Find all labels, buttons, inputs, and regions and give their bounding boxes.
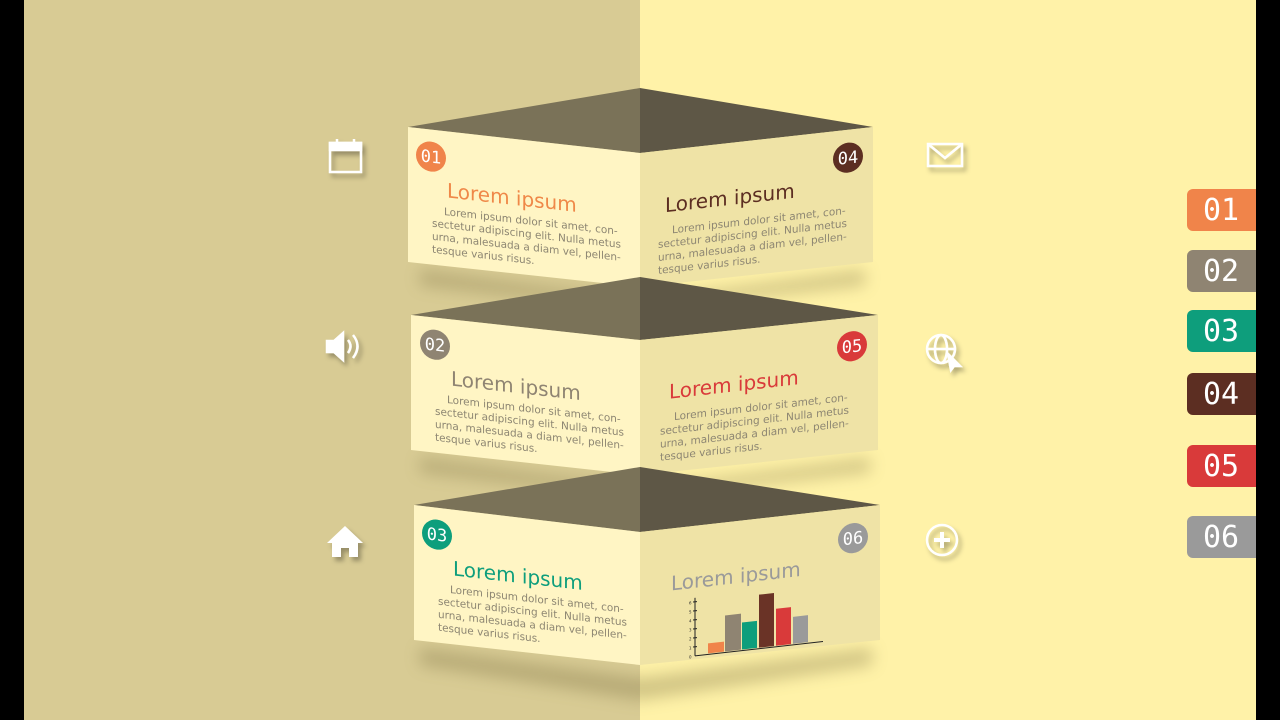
panel 05: tesque varius risus. [660, 440, 763, 464]
panel 06 with chart: Lorem ipsum [671, 557, 801, 596]
panel 01 [408, 127, 640, 287]
panel 05: 05 [842, 336, 862, 358]
panel 06 with chart: 06 [843, 528, 863, 550]
tab 01 [1187, 189, 1262, 231]
bar chart: 1 [689, 645, 692, 651]
panel 03: sectetur adipiscing elit. Nulla metus [438, 596, 627, 629]
bar chart: 2 [689, 636, 692, 642]
tier 2 [411, 277, 878, 475]
icons left [327, 139, 363, 557]
panel 02: Lorem ipsum dolor sit amet, con- [447, 394, 621, 426]
tab 05 [1187, 445, 1262, 487]
roof 1 [408, 88, 873, 153]
panel 02: sectetur adipiscing elit. Nulla metus [435, 406, 624, 439]
panel 01: sectetur adipiscing elit. Nulla metus [432, 218, 621, 251]
tab 02: 02 [1203, 254, 1239, 289]
tab 05: 05 [1203, 449, 1239, 484]
tab list [1187, 189, 1262, 558]
panel 04: 04 [838, 148, 858, 170]
icons right [927, 144, 962, 555]
panel 02: Lorem ipsum [451, 367, 581, 405]
panel 02: urna, malesuada a diam vel, pellen- [435, 419, 624, 452]
roof 2 [411, 277, 878, 340]
panel 03: Lorem ipsum [453, 556, 583, 595]
tab 04: 04 [1203, 377, 1239, 412]
bar chart [689, 583, 823, 660]
right black bar [1256, 0, 1280, 720]
panel 05: Lorem ipsum [669, 365, 799, 404]
panel 03: Lorem ipsum dolor sit amet, con- [450, 584, 624, 616]
bar chart: 0 [689, 654, 692, 660]
tier shadows [420, 270, 872, 700]
panel 02: 02 [425, 335, 445, 357]
panel 04: tesque varius risus. [658, 254, 761, 277]
panel 04: sectetur adipiscing elit. Nulla metus [658, 218, 847, 251]
tab 03: 03 [1203, 314, 1239, 349]
roof 3 [414, 467, 880, 532]
panel 06 with chart [640, 505, 880, 665]
panel 03: urna, malesuada a diam vel, pellen- [438, 609, 627, 642]
icon: globe cursor [927, 335, 960, 370]
panel 05: sectetur adipiscing elit. Nulla metus [660, 405, 849, 438]
tab 04 [1187, 373, 1262, 415]
panel 01: Lorem ipsum [447, 178, 577, 217]
tab 03 [1187, 310, 1262, 352]
icon: plus circle [927, 525, 957, 555]
bar chart: 6 [689, 600, 692, 606]
panel 01: 01 [421, 146, 441, 169]
tab 06: 06 [1203, 520, 1239, 555]
panel 02 [411, 315, 640, 475]
tab 02 [1187, 250, 1262, 292]
tab 06 [1187, 516, 1262, 558]
icon: home [327, 526, 363, 557]
panel 03: 03 [427, 524, 447, 547]
panel 03: tesque varius risus. [438, 622, 541, 645]
panel 05: urna, malesuada a diam vel, pellen- [660, 418, 849, 451]
icon: mail [928, 144, 962, 166]
icon: calendar [330, 139, 361, 172]
bar chart: 4 [689, 618, 692, 624]
bar chart: 5 [689, 609, 692, 615]
tab 01: 01 [1203, 193, 1239, 228]
panel 04: urna, malesuada a diam vel, pellen- [658, 231, 847, 264]
icon: speaker [327, 333, 358, 360]
bar chart: 3 [689, 627, 692, 633]
panel 05: Lorem ipsum dolor sit amet, con- [674, 392, 848, 423]
panel 02: tesque varius risus. [435, 432, 538, 455]
panel 04 [640, 127, 873, 287]
tier 3 [414, 467, 880, 665]
panel 01: urna, malesuada a diam vel, pellen- [432, 231, 621, 264]
panel 04: Lorem ipsum dolor sit amet, con- [672, 205, 846, 236]
panel 03 [414, 505, 640, 665]
panel 01: tesque varius risus. [432, 244, 535, 267]
panel 05 [640, 315, 878, 475]
panel 01: Lorem ipsum dolor sit amet, con- [444, 206, 618, 238]
panel 04: Lorem ipsum [665, 179, 795, 217]
tier 1 [408, 88, 873, 287]
